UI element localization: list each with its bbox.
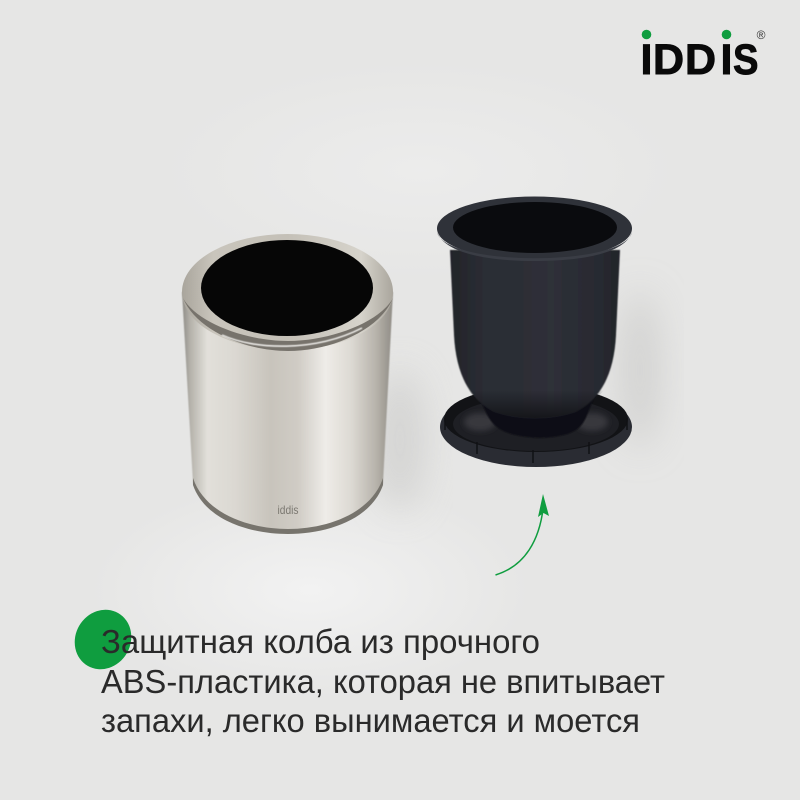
logo: IDDIS: S xyxy=(733,36,758,84)
steel cylinder xyxy=(182,234,424,534)
rim highlight xyxy=(222,328,362,346)
rim xyxy=(182,234,393,350)
logo: IDDIS: D xyxy=(685,36,716,84)
flask body xyxy=(450,250,620,418)
flange xyxy=(437,196,632,260)
logo: IDDIS: I xyxy=(720,36,732,84)
rim ticks xyxy=(445,418,627,463)
flask opening xyxy=(453,202,617,253)
description text: запахи, легко вынимается и моется xyxy=(101,702,640,739)
body bottom shade xyxy=(468,390,604,418)
engraved brand: iddis xyxy=(278,503,298,517)
logo: IDDIS: ® xyxy=(757,28,766,42)
opening xyxy=(201,240,373,336)
logo: IDDIS xyxy=(640,28,766,84)
black plastic flask xyxy=(437,196,660,467)
base edge xyxy=(193,478,383,534)
green accent shape xyxy=(64,599,142,680)
logo: IDDIS: D xyxy=(653,36,684,84)
arrow xyxy=(496,494,549,575)
description text: ABS-пластика, которая не впитывает xyxy=(101,663,665,700)
cylinder body xyxy=(182,292,393,533)
base disc xyxy=(440,386,632,467)
foot xyxy=(478,395,596,438)
description text: Защитная колба из прочного xyxy=(101,623,540,660)
description text xyxy=(101,623,665,739)
logo: IDDIS: I xyxy=(640,36,652,84)
